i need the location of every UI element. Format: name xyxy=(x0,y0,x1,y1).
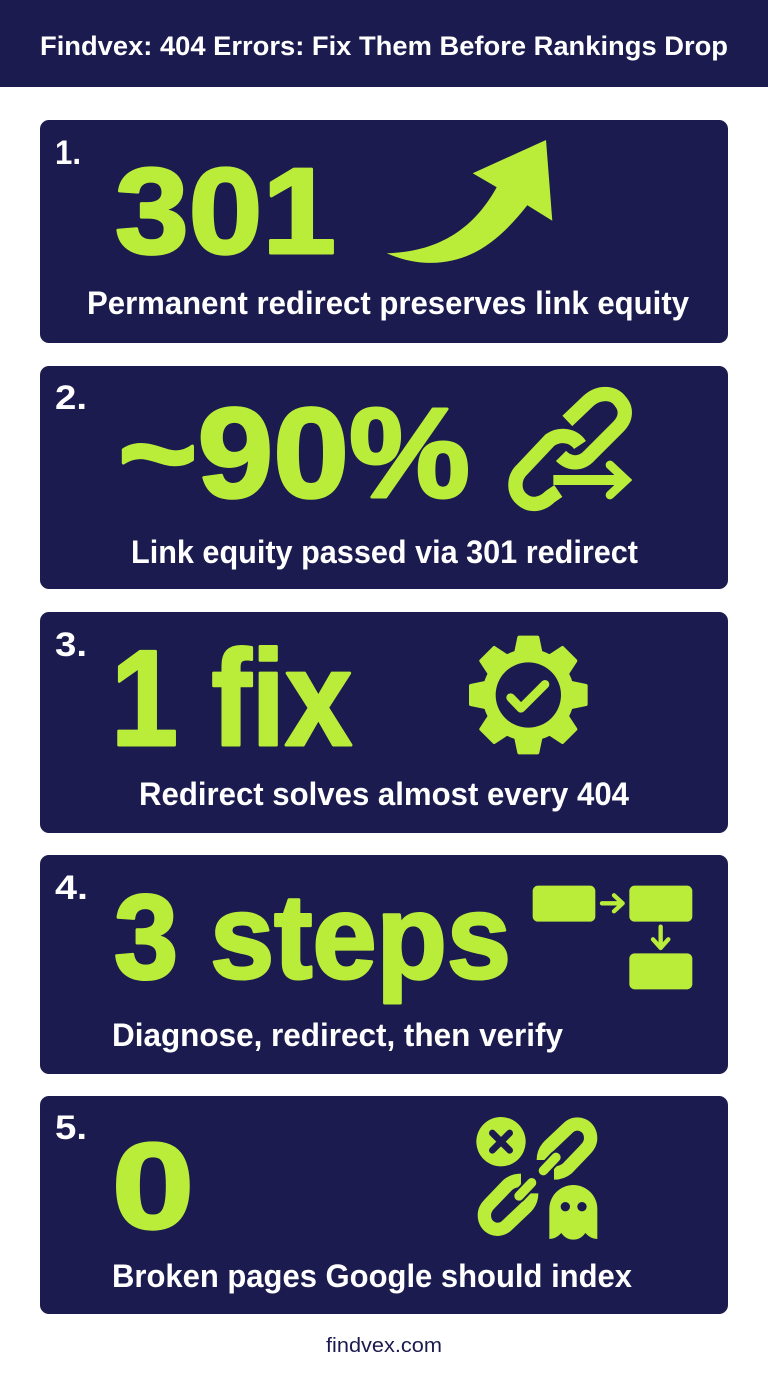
stat: 3 steps: 3 steps xyxy=(114,870,511,1004)
icon: flow diagram xyxy=(533,886,692,989)
caption 5: Broken pages Google should index xyxy=(112,1258,632,1294)
number 5: 5. xyxy=(55,1109,87,1147)
icon: upward curved arrow xyxy=(387,140,552,263)
panel: zero broken pages xyxy=(40,1096,728,1314)
header band xyxy=(0,0,768,87)
number 3: 3. xyxy=(55,626,87,664)
icon: broken link, error and ghost xyxy=(476,1117,597,1240)
icon: chain link with arrow xyxy=(515,394,626,504)
number 1: 1. xyxy=(55,134,81,172)
panel: 301 redirect xyxy=(40,120,728,343)
panel: link equity xyxy=(40,366,728,589)
panel: three steps xyxy=(40,855,728,1074)
number 2: 2. xyxy=(55,379,87,417)
stat: 1 fix: 1 fix xyxy=(111,622,352,774)
footer url: findvex.com xyxy=(326,1335,442,1357)
caption 1: Permanent redirect preserves link equity xyxy=(87,285,689,321)
number 4: 4. xyxy=(55,869,88,907)
caption 4: Diagnose, redirect, then verify xyxy=(112,1017,563,1053)
stat: 0: 0 xyxy=(112,1118,194,1254)
caption 3: Redirect solves almost every 404 xyxy=(139,776,629,812)
title: Findvex: 404 Errors: Fix Them Before Rankings Drop xyxy=(40,31,728,61)
icon: gear with check xyxy=(471,637,586,753)
panel: one fix xyxy=(40,612,728,833)
caption 2: Link equity passed via 301 redirect xyxy=(131,534,638,570)
stat: ~90%: ~90% xyxy=(118,382,470,525)
stat: 301: 301 xyxy=(115,143,336,279)
